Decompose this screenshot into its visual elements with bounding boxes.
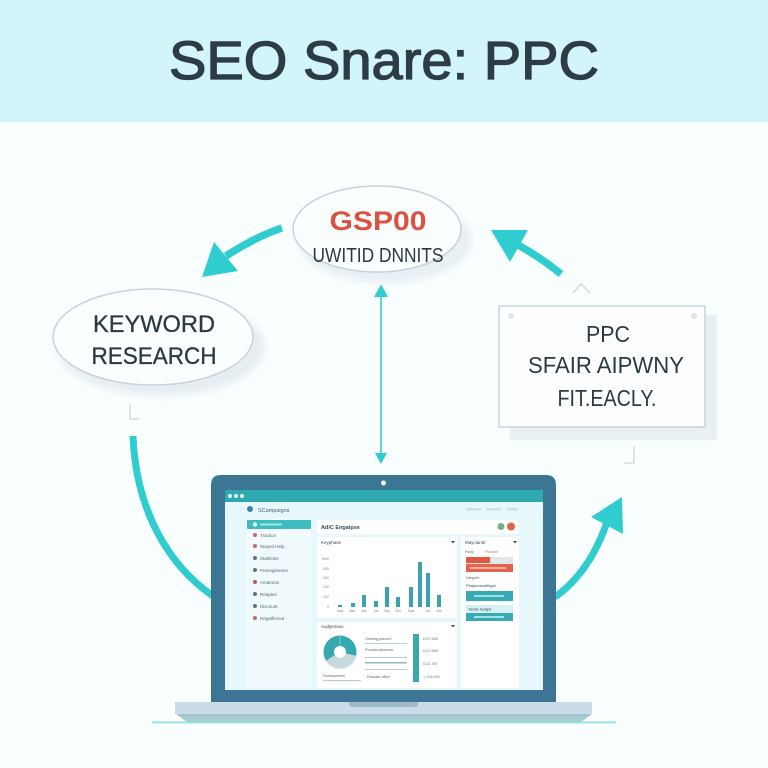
panel: side column	[461, 537, 519, 688]
panel: bar chart: 300	[323, 576, 329, 580]
main header card: AdiC Engaipse	[321, 525, 360, 531]
panel: audience donut: 6,42,787	[423, 662, 438, 666]
panel: audience donut: 6,47,688	[423, 649, 438, 653]
panel: bar chart: Mat	[436, 609, 442, 613]
arrow: PPC panel to top node	[491, 230, 561, 274]
sidebar: Regatfimout	[260, 616, 285, 621]
arrow: laptop to PPC panel	[555, 497, 623, 597]
panel: bar chart: Mnt	[395, 609, 401, 613]
panel: side column: Tackle budget	[468, 608, 492, 612]
node: keyword research ellipse: RESEARCH	[92, 343, 216, 370]
panel: audience donut: Audytsreus	[321, 624, 344, 629]
chart bars	[338, 562, 441, 607]
panel: bar chart: Keyphase	[321, 540, 342, 545]
dashboard header	[247, 506, 518, 514]
small corner marks	[130, 284, 634, 463]
panel: side column: Mayclantit	[465, 540, 486, 545]
laptop screen	[225, 490, 543, 690]
panel: bar chart: Jan	[425, 609, 431, 613]
main header card	[317, 520, 519, 534]
panel: audience donut: 6,57,638	[423, 637, 438, 641]
panel: bar chart: 5m0	[322, 557, 329, 561]
panel: bar chart: Daia	[337, 609, 344, 613]
node heading: GSP00	[330, 206, 426, 236]
sidebar: Amatorus	[260, 580, 280, 585]
sidebar: Reaptes	[260, 592, 278, 597]
panel: bar chart: Jan	[373, 609, 379, 613]
panel: bar chart: 200	[323, 585, 329, 589]
sidebar: Stayed Help	[260, 544, 285, 549]
laptop	[152, 475, 616, 723]
panel: bar chart: Sost	[408, 609, 414, 613]
arrow: top node to keyword research	[202, 228, 282, 277]
sidebar: Stakholer	[260, 556, 280, 561]
panel: audience donut	[317, 622, 457, 688]
panel: side column: Hangent	[466, 576, 479, 580]
sidebar	[246, 518, 311, 688]
panel: bar chart	[317, 537, 457, 618]
panel: bar chart: Mar	[361, 609, 368, 613]
card text: PPC	[586, 321, 630, 347]
list rows: Gesting placent	[365, 637, 392, 641]
list rows	[323, 637, 407, 681]
panel: bar chart: Sep	[384, 609, 390, 613]
panel: audience donut: 1,126,900	[423, 675, 440, 679]
panel: PPC card	[499, 306, 717, 440]
panel: side column: Pasty	[465, 550, 474, 554]
list rows: Reastar office	[367, 675, 390, 679]
panel: PPC card: SFAIR AIPWNY	[528, 352, 684, 378]
list rows: Restorpment	[323, 674, 346, 678]
title: SEO Snare: PPC	[169, 31, 599, 91]
dashboard header: SCampaigns	[258, 508, 290, 514]
node label: KEYWORD	[93, 311, 215, 338]
sidebar: Traction	[260, 533, 277, 538]
panel: side column: Plaorant	[485, 550, 498, 554]
panel: bar chart: 400	[323, 567, 329, 571]
sidebar: Discount	[260, 604, 278, 609]
node: keyword research ellipse	[53, 289, 265, 396]
arrow: two-way top node to laptop	[374, 284, 388, 464]
arrow: keyword research to laptop	[133, 436, 213, 596]
panel: PPC card: FIT.EACLY.	[558, 385, 656, 411]
panel: bar chart: Inlet	[349, 609, 355, 613]
laptop base	[152, 702, 616, 723]
browser bar	[225, 490, 543, 502]
sidebar: Preengisment	[260, 568, 289, 573]
node: top ellipse	[293, 186, 472, 283]
panel: bar chart: 100	[323, 595, 329, 599]
node subtext: UWITID DNNITS	[312, 245, 444, 267]
laptop lid	[211, 475, 556, 704]
title banner	[0, 0, 768, 122]
list rows: Pimzstrobtaness	[365, 648, 393, 652]
donut chart	[324, 635, 356, 668]
panel: side column: Phaynusedthiger	[466, 583, 497, 588]
panel: bar chart: 0	[327, 605, 329, 609]
